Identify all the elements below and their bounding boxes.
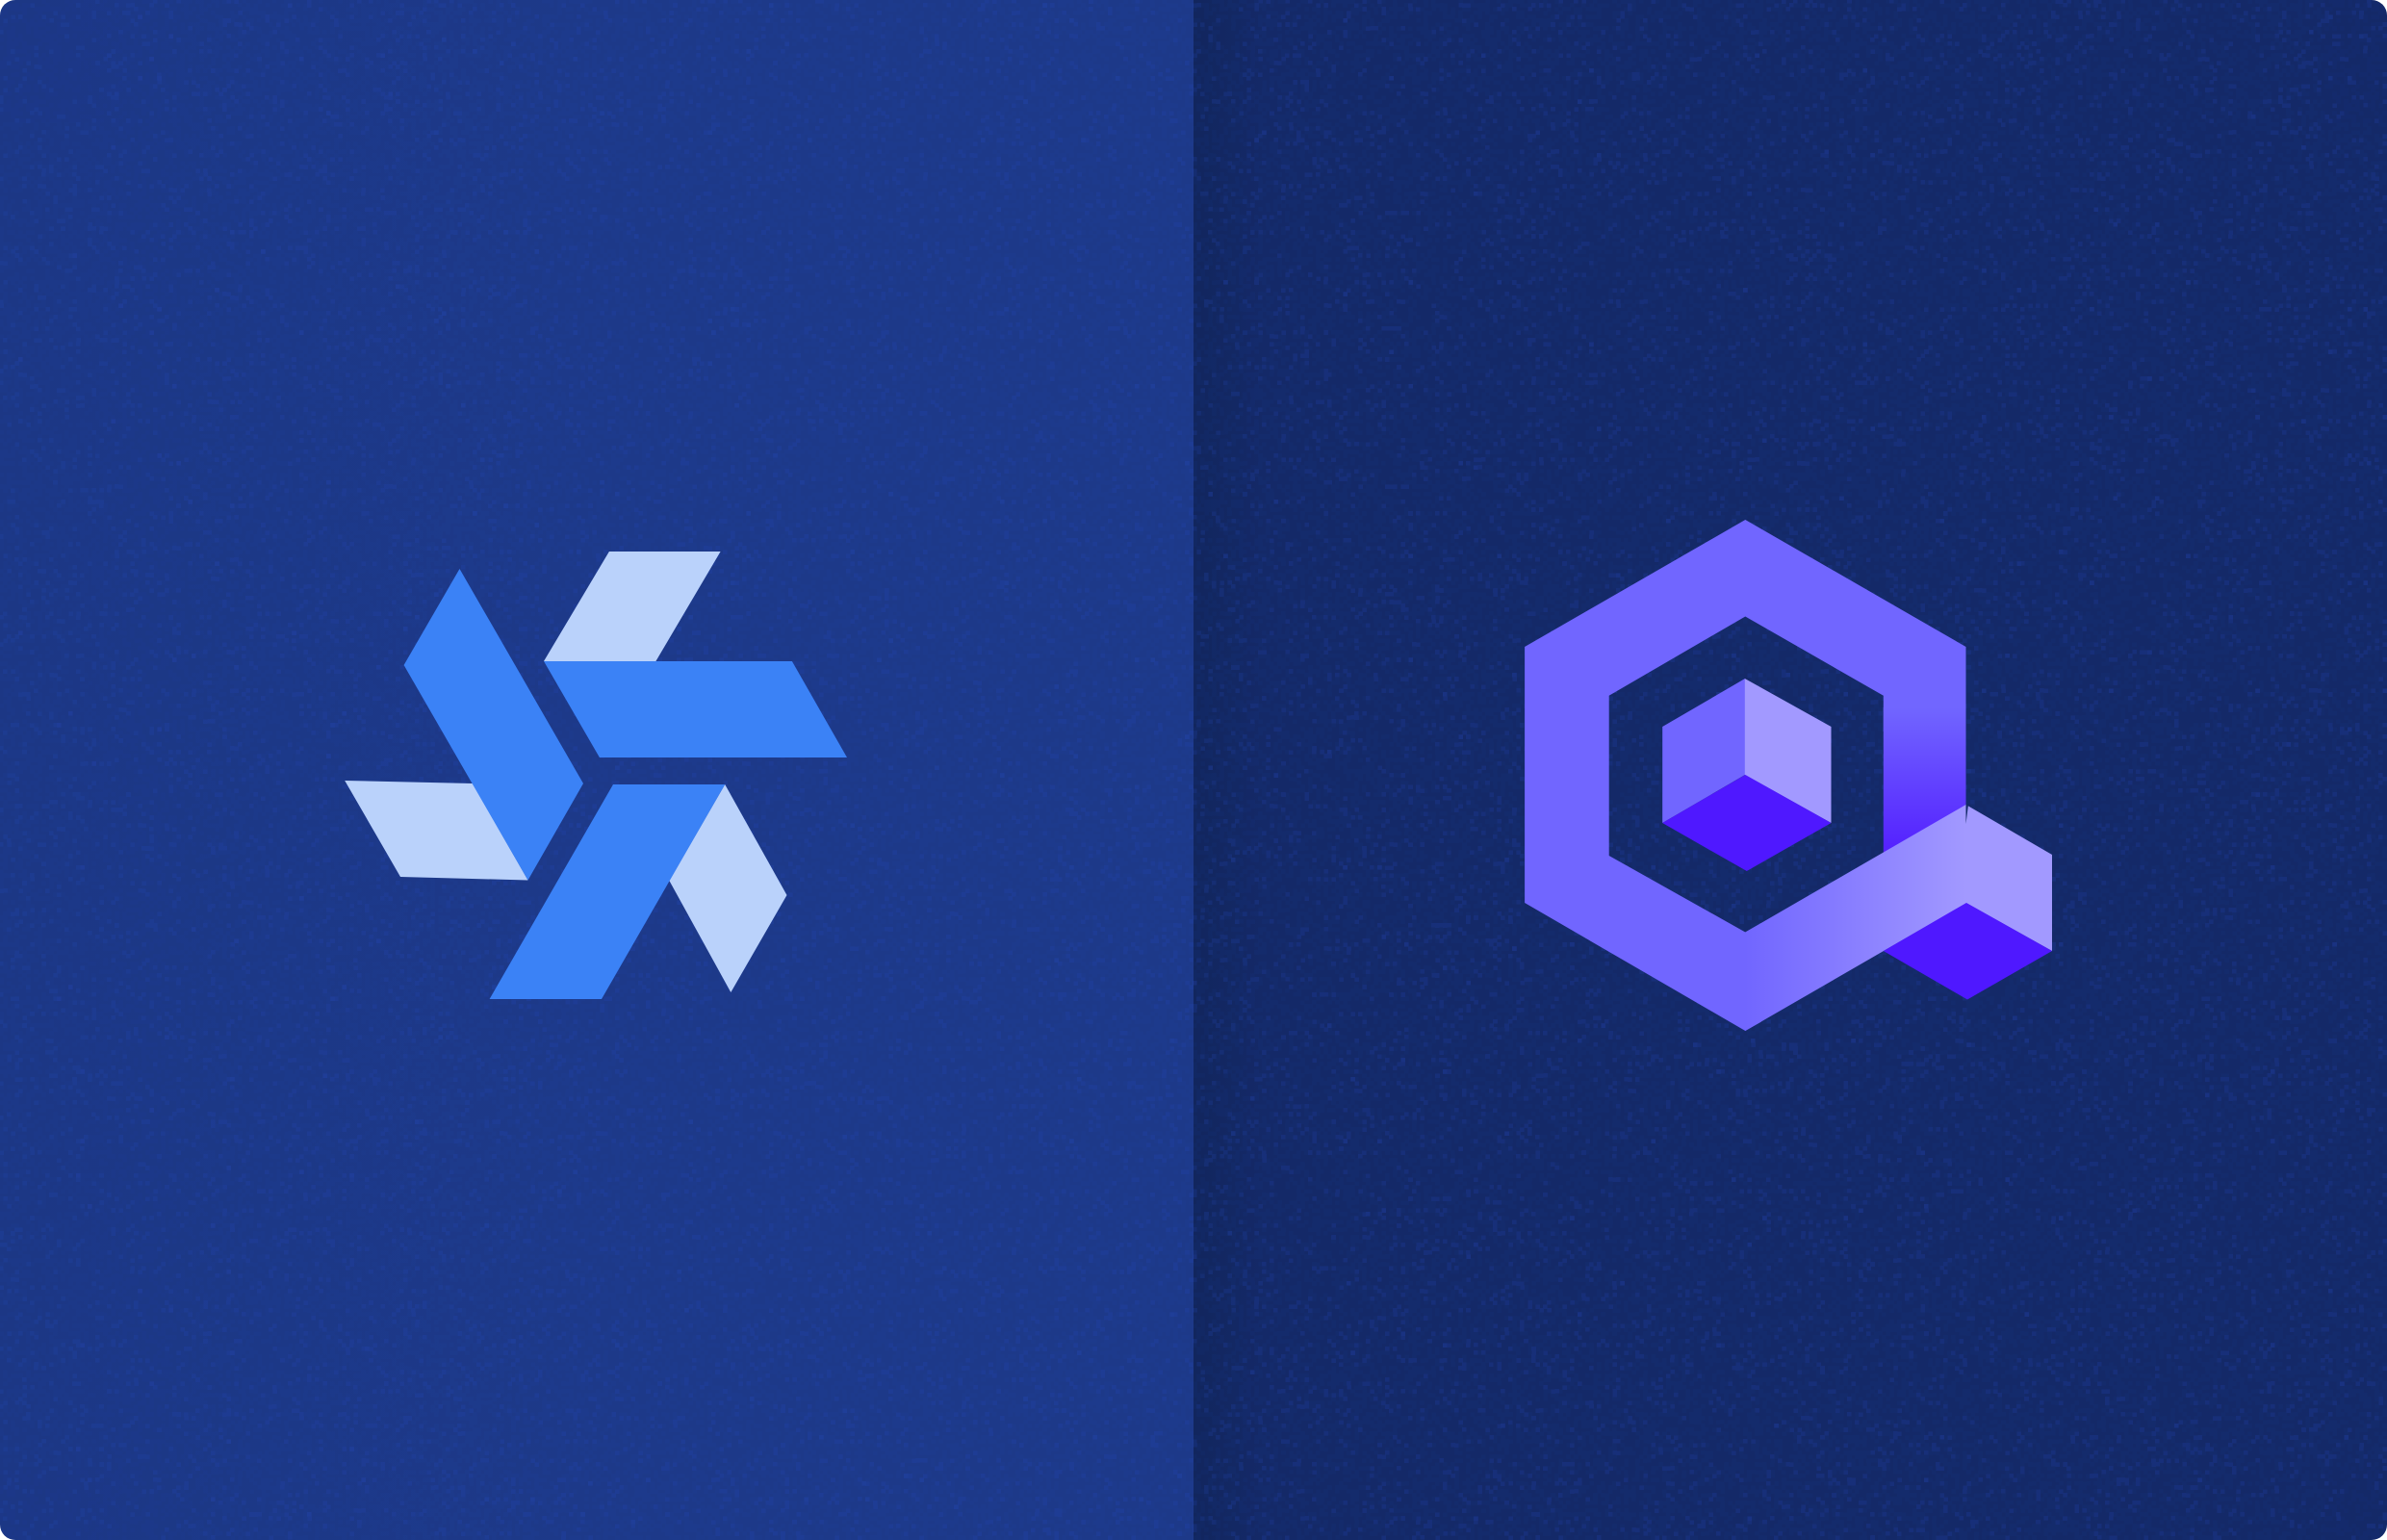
inner cube bottom face (1662, 775, 1831, 871)
pinwheel top light blade (544, 552, 721, 661)
hexagon right bar with gradient (1883, 707, 1965, 853)
inner cube right face (1745, 679, 1831, 823)
panel: left blue background (0, 0, 1194, 1540)
icon: pinwheel logo (345, 552, 847, 999)
panel: right navy background (1194, 0, 2387, 1540)
small cube cap bottom face (1884, 903, 2052, 999)
notch sliver (1965, 805, 1968, 824)
pinwheel bottom blue blade (490, 784, 725, 999)
small cube cap right face (1965, 805, 2052, 951)
pinwheel right light blade (669, 784, 787, 992)
hexagon ring body (1525, 520, 1965, 1031)
pinwheel right blue blade (544, 661, 847, 757)
pinwheel left light blade (345, 781, 527, 880)
tail band with gradient (1745, 805, 1967, 1031)
pinwheel left blue blade (404, 569, 583, 880)
icon: hexagon cube logo (1525, 520, 2052, 1031)
inner cube left face (1662, 679, 1745, 823)
